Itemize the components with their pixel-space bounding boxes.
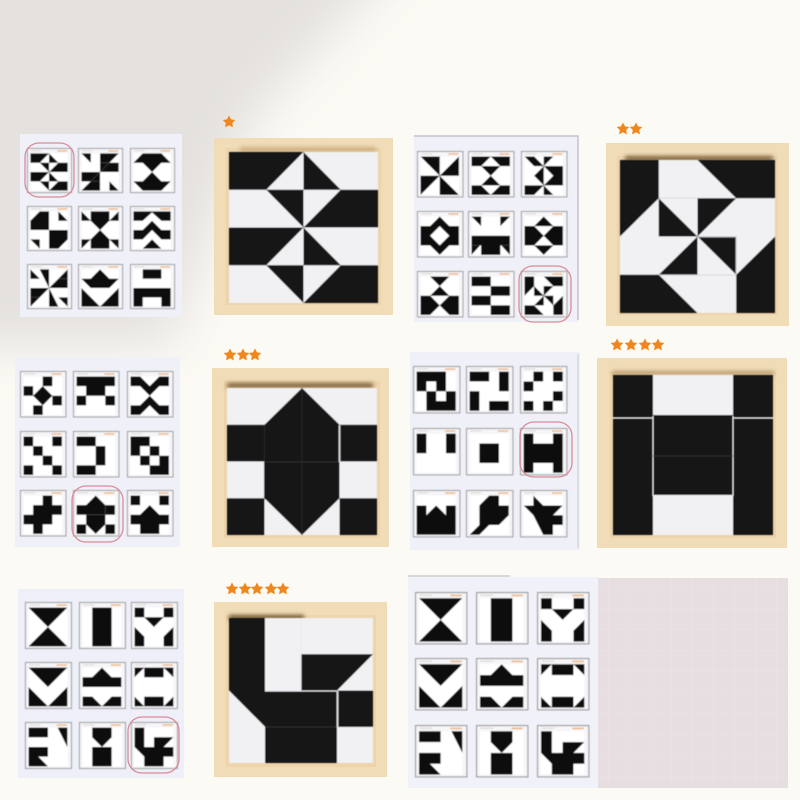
wooden board five: [214, 602, 387, 777]
sheet edge shadow: [577, 354, 579, 548]
wooden board two: [606, 143, 789, 326]
sheet background: [414, 136, 578, 322]
board tiles: [613, 375, 773, 535]
board tiles: [620, 160, 775, 313]
sheet edge shadow: [414, 136, 578, 320]
panel: enlarged puzzle sheet: [408, 576, 598, 788]
red highlight ring: [520, 422, 572, 477]
thumbnails grid: [416, 593, 589, 777]
board top shadow: [625, 156, 773, 161]
thumbnails grid: [414, 367, 567, 537]
board tiles: [229, 618, 373, 763]
panel: blank pink grid sheet: [598, 578, 788, 788]
panel: level three puzzle sheet: [15, 357, 180, 547]
sheet background: [408, 577, 598, 788]
sheet background: [20, 134, 182, 317]
rating: three stars: [224, 348, 261, 360]
rating: two stars: [617, 122, 642, 134]
board recess: [617, 156, 778, 315]
board frame: [214, 602, 387, 777]
board frame: [212, 368, 389, 547]
board recess: [226, 615, 376, 767]
thumbnails grid: [418, 152, 567, 317]
sheet background: [15, 357, 180, 547]
board frame: [214, 138, 393, 315]
board frame: [606, 143, 789, 326]
board tiles: [227, 388, 377, 535]
panel: level four puzzle sheet: [410, 352, 580, 550]
sheet background: [410, 352, 580, 550]
board recess: [224, 381, 380, 538]
red highlight ring: [72, 486, 123, 542]
board top shadow: [227, 383, 373, 388]
board top shadow: [240, 147, 376, 152]
board recess: [610, 371, 776, 538]
panel: level two puzzle sheet: [414, 136, 578, 322]
board recess: [226, 148, 381, 305]
board tiles: [229, 152, 378, 303]
thumbnails grid: [27, 148, 175, 309]
board top shadow: [612, 371, 774, 375]
board frame: [597, 358, 787, 548]
wooden board four: [597, 358, 787, 548]
rating: one star: [223, 116, 235, 127]
sheet edge shadow: [408, 575, 510, 577]
red highlight ring: [25, 143, 74, 197]
rating: four stars: [611, 338, 664, 350]
panel: level five puzzle sheet: [18, 589, 184, 778]
thumbnails grid: [26, 603, 177, 768]
wooden board one: [214, 138, 393, 315]
sheet background: [18, 589, 184, 778]
thumbnails grid: [21, 372, 173, 536]
red highlight ring: [128, 717, 179, 773]
panel: level one puzzle sheet: [20, 134, 182, 317]
board top shadow: [229, 615, 304, 620]
red highlight ring: [519, 266, 571, 322]
rating: five stars: [226, 582, 289, 594]
wooden board three: [212, 368, 389, 547]
